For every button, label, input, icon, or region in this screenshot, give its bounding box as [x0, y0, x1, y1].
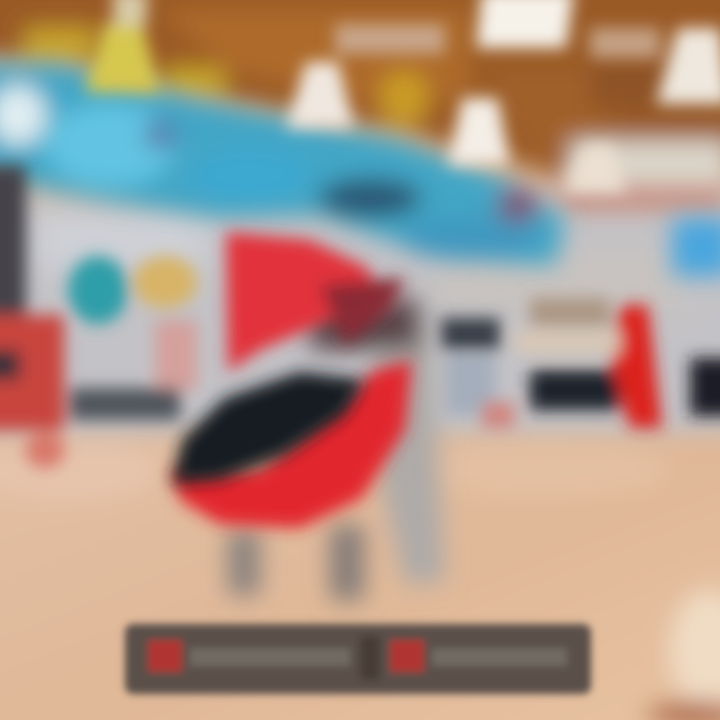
shelves and side displays — [0, 165, 720, 468]
helicopter red fuselage — [172, 360, 412, 528]
blue banner band — [0, 62, 720, 276]
helicopter tail boom and gray body — [228, 300, 445, 600]
floor — [0, 436, 720, 720]
bottom caption bar — [125, 624, 591, 694]
helicopter rear red body — [226, 232, 405, 372]
ceiling — [0, 0, 720, 209]
ceiling lights — [85, 0, 720, 192]
background wall — [0, 190, 720, 450]
bar icon: left red square — [148, 640, 182, 672]
toy helicopter — [172, 232, 445, 600]
helicopter black canopy — [172, 372, 365, 484]
bar icon: right red square — [390, 640, 424, 672]
